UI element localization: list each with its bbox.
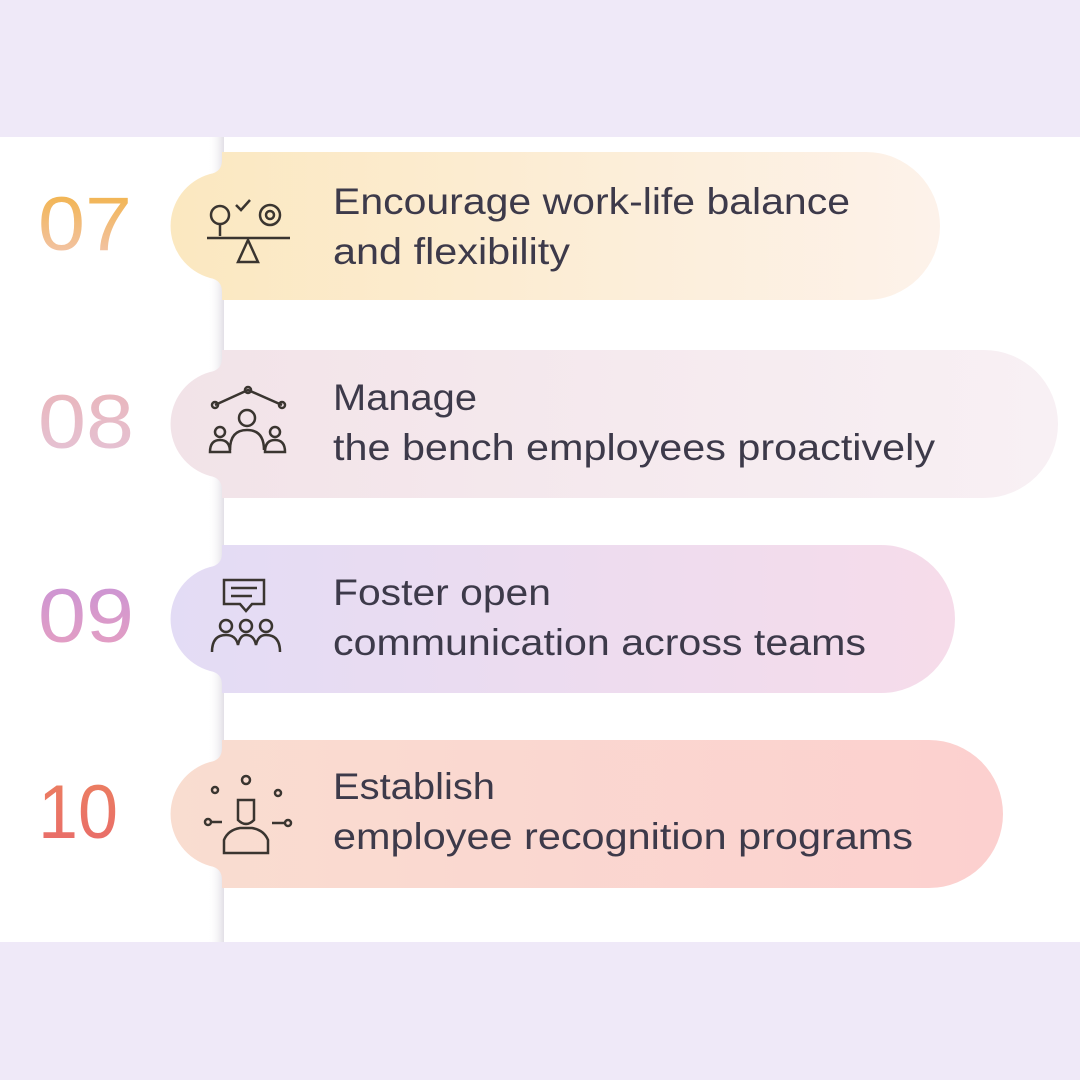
text 09: Foster open bbox=[333, 572, 551, 613]
item 08 bbox=[38, 350, 1058, 498]
icon: balance bbox=[207, 200, 290, 262]
number 09: 09 bbox=[38, 574, 134, 659]
top band bbox=[0, 0, 1080, 137]
text 07: Encourage work-life balance bbox=[333, 181, 850, 222]
icon: recognition bbox=[205, 776, 291, 853]
text 10: Establish bbox=[333, 766, 495, 807]
icon: communication bbox=[212, 580, 280, 652]
item 08: the bench employees proactively bbox=[333, 427, 936, 468]
number 10: 10 bbox=[38, 770, 118, 855]
item 10: employee recognition programs bbox=[333, 816, 913, 857]
text 08: Manage bbox=[333, 377, 477, 418]
item 10 bbox=[38, 740, 1003, 888]
icon: bench team bbox=[210, 387, 285, 452]
item 07 bbox=[38, 152, 940, 300]
item 07: and flexibility bbox=[333, 231, 571, 272]
number 08: 08 bbox=[38, 380, 134, 465]
item 09: communication across teams bbox=[333, 622, 866, 663]
bottom band bbox=[0, 942, 1080, 1080]
vertical line bbox=[208, 137, 224, 942]
item 09 bbox=[38, 545, 955, 693]
number 07: 07 bbox=[38, 182, 132, 267]
